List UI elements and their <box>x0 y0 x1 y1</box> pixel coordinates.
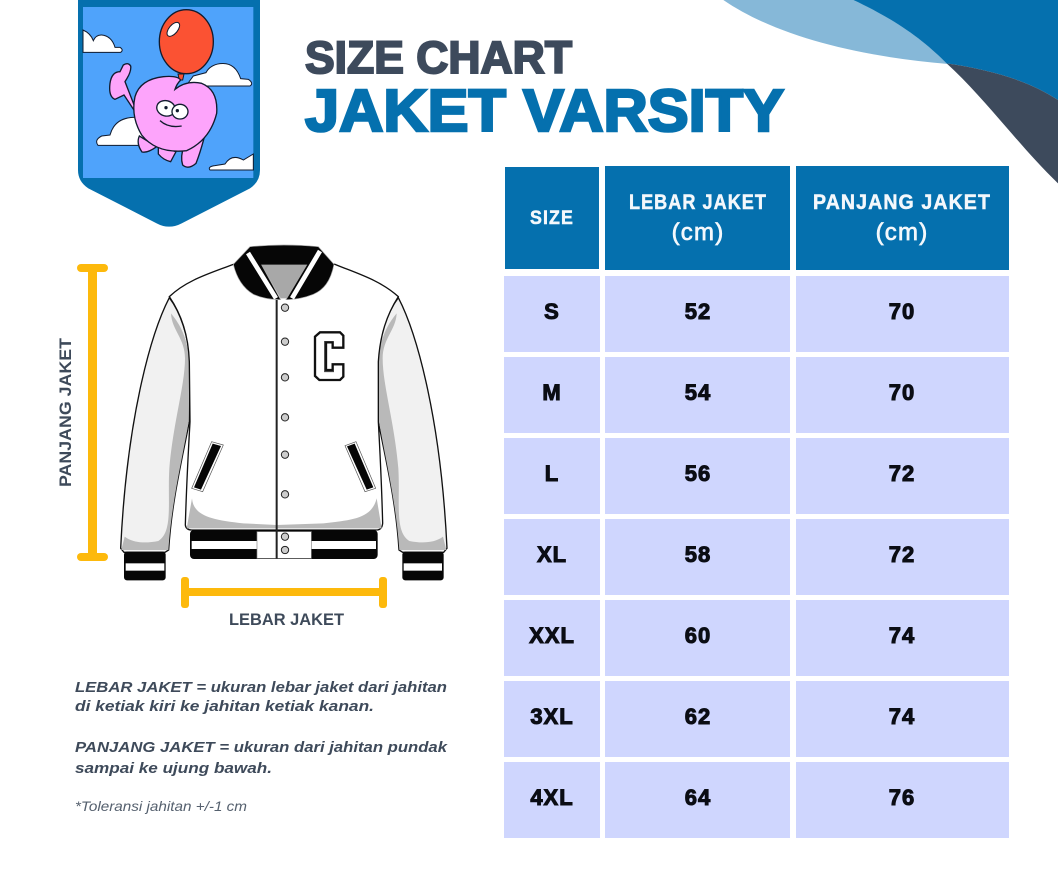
row L: L <box>545 461 559 486</box>
row M <box>504 357 1009 433</box>
clouds <box>83 30 253 170</box>
row M: M <box>542 380 562 405</box>
note: panjang jaket definition <box>75 739 448 777</box>
table header: LEBAR JAKET <box>629 191 767 214</box>
right pocket <box>345 442 376 492</box>
table header: (cm) <box>672 219 724 246</box>
note: lebar jaket definition: di ketiak kiri ke jahitan ketiak kanan. <box>75 698 374 715</box>
row L: 56 <box>685 461 711 486</box>
row S: 70 <box>889 299 915 324</box>
row S <box>504 276 1009 352</box>
row M: 54 <box>685 380 711 405</box>
balloon <box>159 10 213 80</box>
row 4XL <box>504 762 1009 838</box>
row S: 52 <box>685 299 711 324</box>
table header <box>505 166 1009 270</box>
label: lebar jaket: LEBAR JAKET <box>229 610 345 629</box>
ribbed hem <box>190 530 378 559</box>
pink heart character <box>110 64 217 167</box>
note: panjang jaket definition: PANJANG JAKET = ukuran dari jahitan pundak <box>75 739 448 756</box>
row M: 70 <box>889 380 915 405</box>
badge: balloon character <box>78 0 260 227</box>
row 3XL <box>504 681 1009 757</box>
row S: S <box>544 299 560 324</box>
table header: SIZE <box>530 208 574 229</box>
row 3XL: 74 <box>889 704 915 729</box>
title: jaket varsity: JAKET VARSITY <box>305 78 784 144</box>
row XL: 72 <box>889 542 915 567</box>
measure arrow: panjang jaket <box>77 264 108 561</box>
placket line <box>274 300 280 558</box>
note: lebar jaket definition: LEBAR JAKET = ukuran lebar jaket dari jahitan <box>75 679 447 696</box>
note: lebar jaket definition <box>75 679 447 715</box>
left sleeve <box>121 298 190 552</box>
row XXL: 74 <box>889 623 915 648</box>
row L <box>504 438 1009 514</box>
jacket illustration <box>121 245 447 580</box>
table header: PANJANG JAKET <box>813 191 991 214</box>
table header: (cm) <box>876 219 928 246</box>
right cuff <box>402 552 444 580</box>
row 4XL: 64 <box>685 785 711 810</box>
row XXL <box>504 600 1009 676</box>
row 3XL: 62 <box>685 704 711 729</box>
row 4XL: 4XL <box>530 785 574 810</box>
collar <box>233 245 334 300</box>
row 3XL: 3XL <box>530 704 574 729</box>
note: tolerance: *Toleransi jahitan +/-1 cm <box>75 798 247 814</box>
left cuff <box>124 552 166 580</box>
jacket body <box>169 264 398 530</box>
row XL: XL <box>537 542 567 567</box>
row L: 72 <box>889 461 915 486</box>
decorative corner waves <box>723 0 1058 183</box>
buttons <box>281 304 289 554</box>
note: panjang jaket definition: sampai ke ujung bawah. <box>75 760 272 777</box>
row 4XL: 76 <box>889 785 915 810</box>
measure arrow: lebar jaket <box>181 577 387 608</box>
title: size chart: SIZE CHART <box>305 32 572 83</box>
row XXL: 60 <box>685 623 711 648</box>
row XXL: XXL <box>529 623 575 648</box>
size table <box>504 166 1009 838</box>
label: panjang jaket: PANJANG JAKET <box>56 337 75 487</box>
right sleeve <box>378 298 447 552</box>
left pocket <box>192 442 223 492</box>
row XL: 58 <box>685 542 711 567</box>
row XL <box>504 519 1009 595</box>
letter C patch <box>315 332 343 380</box>
